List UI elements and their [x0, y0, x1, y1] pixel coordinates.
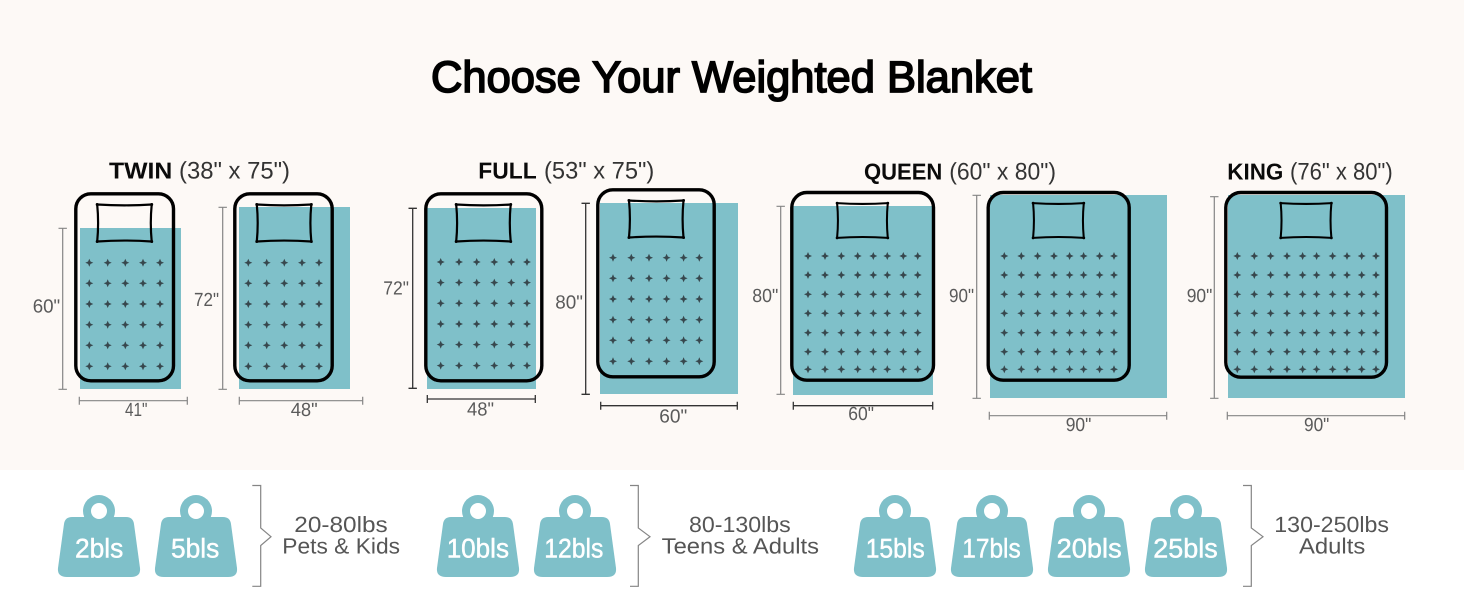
dimension: 80 inch height — [752, 206, 785, 394]
icon: 2 weight: 2bls — [75, 533, 123, 563]
icon: 20 weight: 20bls — [1057, 533, 1122, 563]
heading: full dimensions: (53" x 75") — [544, 157, 654, 184]
icon: 5 weight: 5bls — [171, 533, 219, 563]
dimension: 90 inch width: 90" — [1304, 415, 1329, 436]
icon: 12 weight — [534, 495, 616, 577]
text: pets and kids range: 20-80lbs — [294, 512, 388, 537]
title: Choose Your Weighted Blanket — [431, 53, 1032, 102]
icon: 10 weight — [437, 495, 519, 577]
dimension: 48 inch width — [239, 397, 363, 421]
dimension: 90 inch width: 90" — [1066, 415, 1091, 436]
panel: pets and kids weights — [58, 486, 400, 586]
dimension: 90 inch height — [949, 195, 981, 398]
dimension: 90 inch height: 90" — [949, 286, 974, 307]
panel: twin size — [33, 158, 363, 421]
diagram: 80 x 60 blanket on full bed — [598, 190, 738, 394]
dimension: 41 inch width: 41" — [125, 400, 148, 421]
dimension: 48 inch width: 48" — [291, 400, 318, 421]
bracket: teens and adults — [630, 486, 650, 586]
dimension: 90 inch height: 90" — [1187, 286, 1212, 307]
diagram: 90 x 90 blanket on queen bed — [988, 192, 1167, 398]
dimension: 48 inch width: 48" — [467, 400, 494, 421]
dimension: 72 inch height: 72" — [383, 278, 409, 299]
heading: full: FULL — [478, 157, 537, 183]
dimension: 72 inch height — [194, 207, 227, 389]
icon: 12 weight: 12bls — [544, 533, 603, 563]
text: adults range: 130-250lbs — [1274, 512, 1389, 537]
bracket: pets and kids — [252, 486, 271, 586]
icon: 10 weight: 10bls — [447, 533, 509, 563]
text: teens and adults range: Teens & Adults — [662, 533, 819, 558]
text: adults range: Adults — [1299, 533, 1365, 558]
diagram: 60 x 41 blanket on twin bed — [76, 194, 181, 389]
heading: twin dimensions: (38" x 75") — [179, 158, 290, 184]
icon: 15 weight: 15bls — [866, 533, 925, 563]
text: teens and adults range — [662, 512, 819, 558]
heading: king dimensions: (76" x 80") — [1290, 158, 1393, 185]
bracket: adults — [1243, 486, 1263, 586]
dimension: 80 inch height — [555, 203, 590, 394]
icon: 15 weight — [854, 495, 936, 577]
dimension: 48 inch width — [427, 395, 535, 421]
dimension: 80 inch height: 80" — [752, 286, 778, 307]
dimension: 60 inch height — [33, 228, 67, 389]
heading: queen: QUEEN — [864, 158, 942, 184]
icon: 20 weight — [1048, 495, 1130, 577]
icon: 17 weight — [951, 495, 1033, 577]
diagram: 72 x 48 blanket on twin bed — [235, 194, 350, 389]
icon: 5 weight — [155, 495, 237, 577]
panel: full size — [383, 157, 738, 427]
panel: queen size — [752, 158, 1167, 436]
dimension: 41 inch width — [79, 397, 187, 421]
dimension: 60 inch height: 60" — [33, 297, 60, 318]
dimension: 90 inch height — [1187, 197, 1218, 398]
text: pets and kids range — [282, 512, 400, 558]
diagram: 90 x 90 blanket on king bed — [1226, 192, 1405, 398]
dimension: 60 inch width: 60" — [659, 406, 687, 427]
dimension: 72 inch height — [383, 208, 417, 388]
dimension: 72 inch height: 72" — [194, 290, 219, 311]
panel: background — [0, 0, 1464, 470]
panel: teens and adults weights — [437, 486, 819, 586]
text: teens and adults range: 80-130lbs — [689, 512, 791, 537]
text: adults range — [1274, 512, 1389, 558]
dimension: 80 inch height: 80" — [555, 292, 583, 313]
icon: 2 weight — [58, 495, 140, 577]
heading: twin: TWIN — [109, 158, 172, 184]
icon: 17 weight: 17bls — [962, 533, 1021, 563]
text: pets and kids range: Pets & Kids — [282, 533, 400, 558]
panel: adults weights — [854, 486, 1389, 586]
dimension: 60 inch width — [793, 402, 933, 425]
heading: queen dimensions: (60" x 80") — [949, 158, 1056, 185]
icon: 25 weight — [1145, 495, 1227, 577]
dimension: 90 inch width — [1227, 412, 1405, 436]
icon: 25 weight: 25bls — [1153, 533, 1218, 563]
dimension: 90 inch width — [989, 412, 1167, 436]
diagram: 80 x 60 blanket on queen bed — [792, 192, 934, 395]
dimension: 60 inch width — [601, 402, 737, 427]
heading: king: KING — [1227, 158, 1283, 184]
diagram: 72 x 48 blanket on full bed — [426, 194, 542, 389]
panel: king size — [1187, 158, 1405, 436]
dimension: 60 inch width: 60" — [848, 404, 874, 425]
